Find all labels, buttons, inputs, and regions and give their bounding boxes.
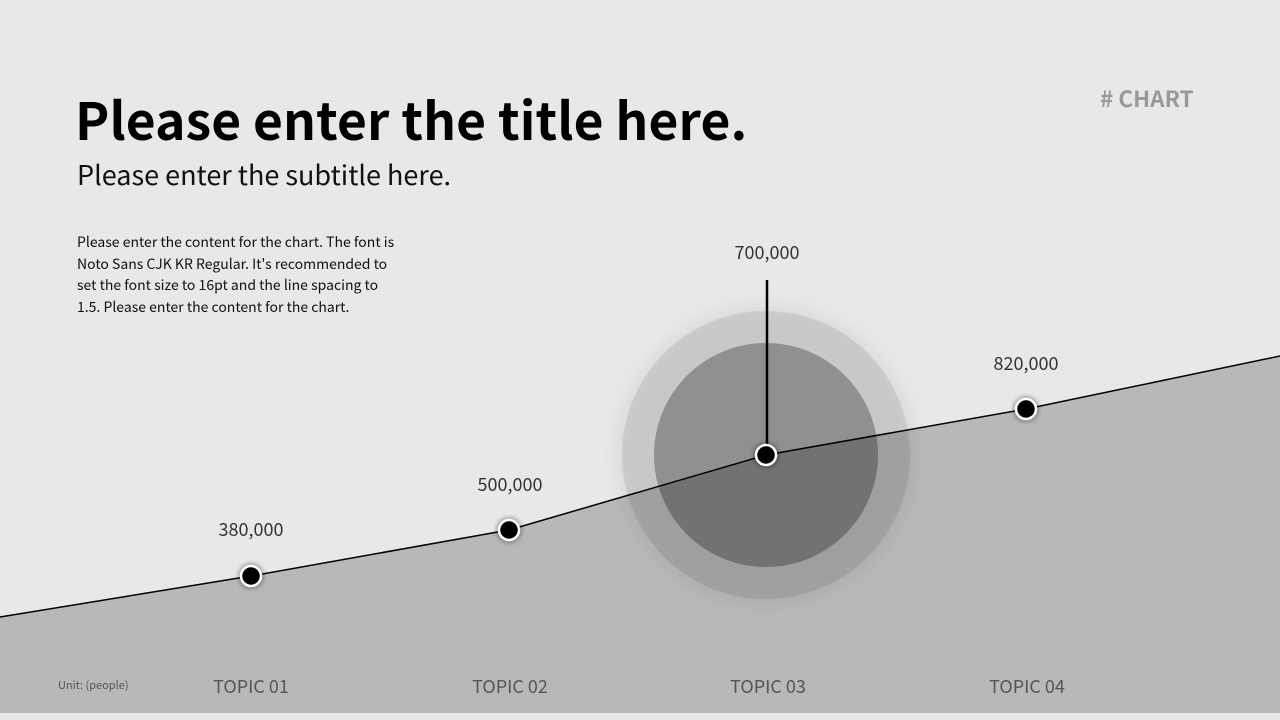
subtitle: Please enter the subtitle here. xyxy=(77,154,451,193)
data points xyxy=(238,396,1039,589)
topic labels xyxy=(213,673,1065,699)
tag: # CHART xyxy=(1100,82,1194,114)
value labels: 820,000 xyxy=(994,350,1058,376)
highlight circles xyxy=(616,305,916,605)
line xyxy=(0,356,1280,617)
value labels: 500,000 xyxy=(478,471,542,497)
pointer line xyxy=(766,280,768,455)
value labels xyxy=(219,239,1058,542)
value labels: 700,000 xyxy=(735,239,799,265)
area fill xyxy=(0,356,1280,713)
description: Please enter the content for the chart. The font is Noto Sans CJK KR Regular. It's recommended to set the font size to 16pt and the line spacing to 1.5. Please enter the content for the chart. xyxy=(77,232,394,316)
topic labels: TOPIC 03 xyxy=(730,673,806,699)
topic labels: TOPIC 04 xyxy=(989,673,1065,699)
topic labels: TOPIC 01 xyxy=(213,673,289,699)
unit label: Unit: (people) xyxy=(58,677,129,693)
title: Please enter the title here. xyxy=(75,80,747,155)
topic labels: TOPIC 02 xyxy=(472,673,548,699)
value labels: 380,000 xyxy=(219,516,283,542)
